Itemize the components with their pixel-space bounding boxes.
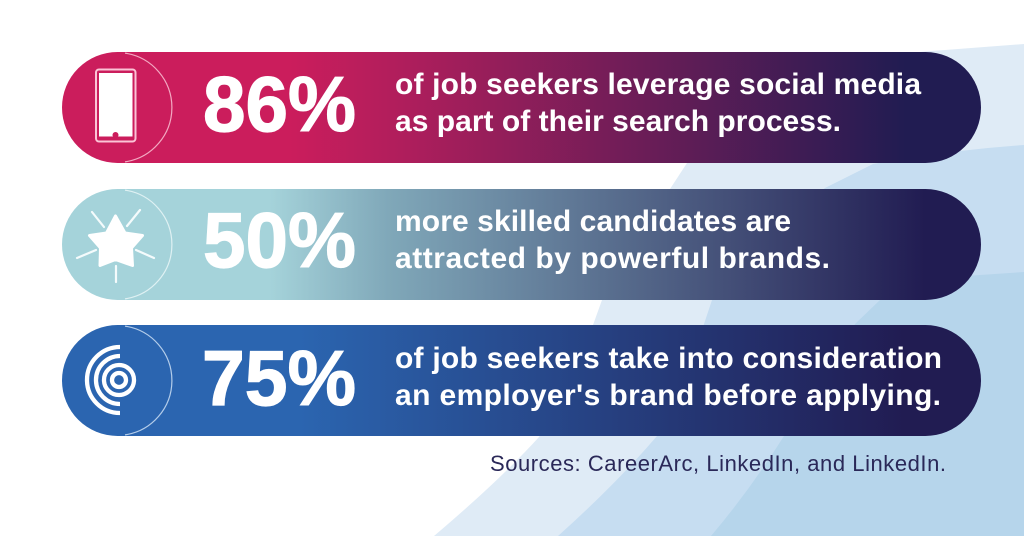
text: 75% description: an employer's brand before applying. — [395, 379, 941, 412]
text: 86% description: of job seekers leverage social media — [395, 68, 921, 101]
text: 86% description — [395, 68, 921, 138]
text: 86% description: as part of their search process. — [395, 105, 841, 138]
text: 50% description: attracted by powerful brands. — [395, 242, 830, 275]
stat: 50%: 50% — [203, 196, 356, 284]
icon: concentric signal rings — [87, 347, 134, 413]
text: 75% description — [395, 342, 942, 412]
panel: 75% employer brand stat — [62, 325, 981, 436]
text: 75% description: of job seekers take into consideration — [395, 342, 942, 375]
icon: smartphone — [96, 70, 136, 142]
stat: 75%: 75% — [202, 334, 356, 422]
panel: 86% social media stat — [62, 52, 981, 163]
text: 50% description — [395, 205, 830, 275]
text: sources: Sources: CareerArc, LinkedIn, and LinkedIn. — [490, 451, 946, 476]
stat: 86%: 86% — [203, 60, 356, 148]
panel: 50% skilled candidates stat — [62, 189, 981, 300]
text: 50% description: more skilled candidates are — [395, 205, 791, 238]
icon: shining star — [77, 210, 154, 282]
